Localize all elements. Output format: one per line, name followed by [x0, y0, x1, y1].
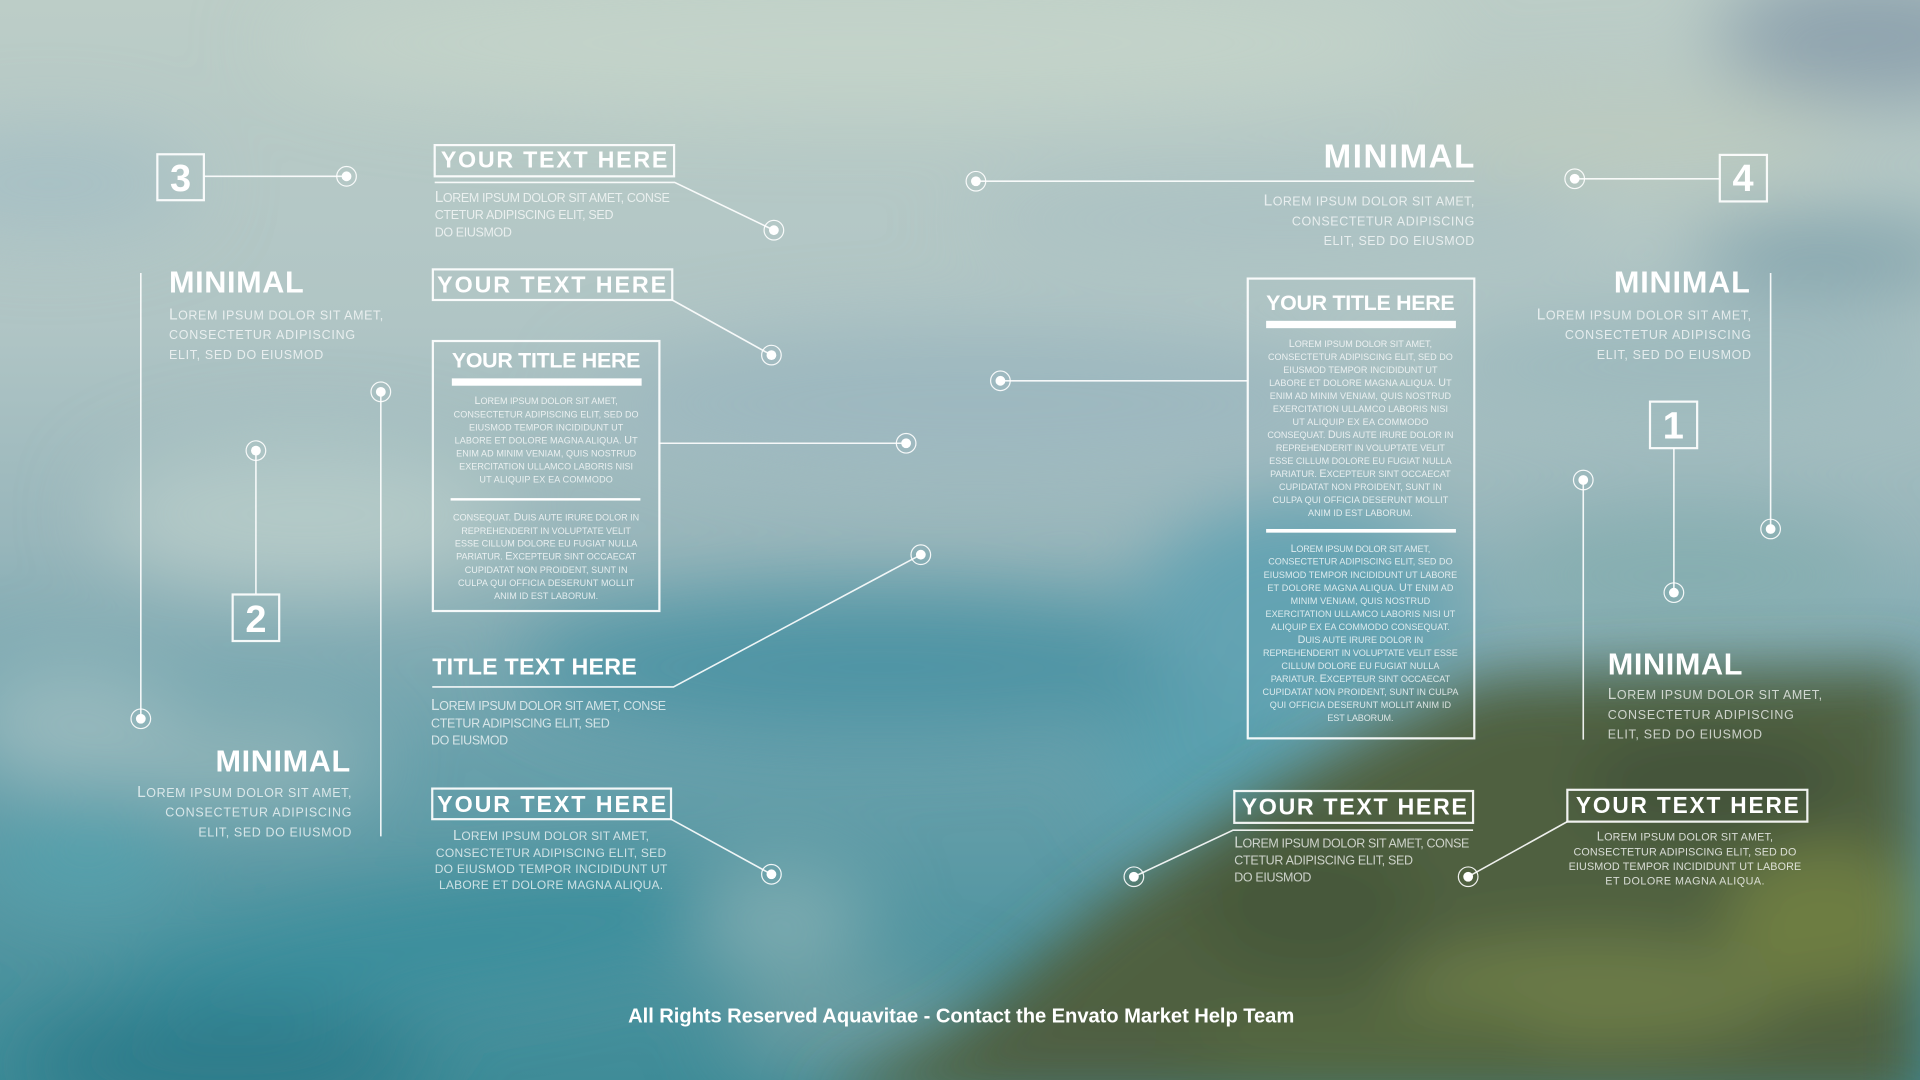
panel: right title box: ET DOLORE MAGNA ALIQUA. UT ENIM AD [1267, 582, 1454, 594]
panel: right title box: CULPA QUI OFFICIA DESERUNT MOLLIT [1273, 495, 1449, 505]
panel: left title box: ANIM ID EST LABORUM. [494, 591, 598, 601]
panel: right title box: QUI OFFICIA DESERUNT MOLLIT ANIM ID [1270, 700, 1451, 710]
panel: right title box: CONSECTETUR ADIPISCING ELIT, SED DO [1268, 557, 1453, 567]
block: minimal upper left: ELIT, SED DO EIUSMOD [169, 348, 323, 362]
callout: number 1 [1650, 402, 1697, 602]
callout: number 3: 3 [170, 158, 191, 200]
block: minimal upper left: MINIMAL [169, 266, 304, 300]
block: minimal lower right [1573, 470, 1822, 741]
panel: right title box: UT ALIQUIP EX EA COMMODO [1292, 417, 1428, 427]
callout: top left text box: YOUR TEXT HERE [441, 147, 667, 173]
callout: top left text box: DO EIUSMOD [435, 225, 512, 239]
callout: lower left text box: LOREM IPSUM DOLOR SIT AMET, [453, 828, 649, 844]
callout: bottom right text box [1458, 790, 1807, 888]
callout: top right minimal: MINIMAL [1324, 139, 1474, 176]
panel: right title box: EXERCITATION ULLAMCO LABORIS NISI [1273, 404, 1448, 414]
block: minimal upper right [1537, 266, 1780, 539]
callout: top right minimal [966, 139, 1474, 248]
panel: left title box: EXERCITATION ULLAMCO LABORIS NISI [459, 462, 633, 472]
callout: second text box [433, 269, 781, 365]
callout: top left text box: CTETUR ADIPISCING ELIT, SED [435, 208, 613, 222]
callout: number 4 [1565, 155, 1767, 201]
callout: top right minimal: ELIT, SED DO EIUSMOD [1324, 234, 1474, 248]
callout: title text here: TITLE TEXT HERE [432, 654, 637, 680]
block: minimal lower left: MINIMAL [216, 744, 350, 778]
panel: left title box: PARIATUR. EXCEPTEUR SINT OCCAECAT [456, 551, 637, 563]
callout: bottom centre-right text box: DO EIUSMOD [1234, 871, 1311, 885]
panel: left title box: EIUSMOD TEMPOR INCIDIDUNT UT [469, 422, 624, 432]
panel: right title box: PARIATUR. EXCEPTEUR SINT OCCAECAT [1270, 468, 1451, 480]
callout: bottom centre-right text box: LOREM IPSUM DOLOR SIT AMET, CONSE [1234, 834, 1469, 851]
panel: right title box: CUPIDATAT NON PROIDENT, SUNT IN CULPA [1262, 687, 1459, 697]
panel: right title box: PARIATUR. EXCEPTEUR SINT OCCAECAT [1271, 673, 1451, 685]
panel: left title box: CONSEQUAT. DUIS AUTE IRURE DOLOR IN [453, 511, 639, 523]
panel: right title box: EST LABORUM. [1327, 713, 1393, 723]
panel: right title box: MINIM VENIAM, QUIS NOSTRUD [1291, 596, 1431, 606]
callout: title text here: DO EIUSMOD [431, 733, 508, 747]
panel: right title box: REPREHENDERIT IN VOLUPTATE VELIT [1276, 443, 1445, 453]
panel: left title box: ESSE CILLUM DOLORE EU FUGIAT NULLA [455, 539, 638, 549]
callout: bottom right text box: CONSECTETUR ADIPISCING ELIT, SED DO [1573, 846, 1796, 858]
panel: right title box: ESSE CILLUM DOLORE EU FUGIAT NULLA [1269, 456, 1453, 466]
panel: right title box: EIUSMOD TEMPOR INCIDIDUNT UT LABORE [1264, 570, 1457, 580]
callout: bottom right text box: EIUSMOD TEMPOR INCIDIDUNT UT LABORE [1569, 861, 1801, 873]
callout: lower left text box: CONSECTETUR ADIPISCING ELIT, SED [436, 846, 666, 860]
panel: right title box [991, 279, 1474, 738]
panel: right title box: LOREM IPSUM DOLOR SIT AMET, [1289, 338, 1432, 350]
block: minimal upper right: CONSECTETUR ADIPISCING [1565, 328, 1751, 342]
panel: left title box: REPREHENDERIT IN VOLUPTATE VELIT [461, 526, 631, 536]
callout: top left text box [435, 145, 784, 240]
block: minimal lower left: ELIT, SED DO EIUSMOD [198, 825, 351, 839]
panel: right title box: REPREHENDERIT IN VOLUPTATE VELIT ESSE [1263, 648, 1458, 658]
callout: top right minimal: LOREM IPSUM DOLOR SIT AMET, [1264, 193, 1474, 210]
callout: lower left text box [432, 789, 781, 892]
callout: number 1: 1 [1663, 405, 1684, 447]
panel: right title box: CONSECTETUR ADIPISCING ELIT, SED DO [1268, 352, 1453, 362]
panel: right title box: LABORE ET DOLORE MAGNA ALIQUA. UT [1269, 377, 1452, 389]
block: minimal lower left: CONSECTETUR ADIPISCING [165, 806, 351, 820]
callout: number 3 [157, 154, 356, 200]
callout: top right minimal: CONSECTETUR ADIPISCING [1292, 214, 1474, 228]
panel: left title box [433, 341, 916, 611]
block: minimal lower right: CONSECTETUR ADIPISCING [1608, 708, 1794, 722]
callout: title text here: LOREM IPSUM DOLOR SIT AMET, CONSE [431, 697, 666, 714]
callout: number 4: 4 [1733, 158, 1754, 200]
panel: left title box: LOREM IPSUM DOLOR SIT AMET, [474, 395, 618, 407]
callout: number 2: 2 [245, 599, 266, 641]
callout: title text here [431, 545, 931, 747]
panel: right title box: CILLUM DOLORE EU FUGIAT NULLA [1281, 661, 1440, 671]
panel: left title box: ENIM AD MINIM VENIAM, QUIS NOSTRUD [456, 449, 637, 459]
panel: right title box: ENIM AD MINIM VENIAM, QUIS NOSTRUD [1270, 391, 1451, 401]
callout: top left text box: LOREM IPSUM DOLOR SIT AMET, CONSE [435, 189, 670, 206]
panel: right title box: YOUR TITLE HERE [1266, 291, 1455, 315]
callout: bottom right text box: ET DOLORE MAGNA ALIQUA. [1605, 876, 1764, 888]
panel: right title box: CONSEQUAT. DUIS AUTE IRURE DOLOR IN [1267, 429, 1453, 441]
panel: right title box: EIUSMOD TEMPOR INCIDIDUNT UT [1283, 365, 1438, 375]
callout: lower left text box: LABORE ET DOLORE MAGNA ALIQUA. [439, 878, 663, 892]
block: minimal lower left: LOREM IPSUM DOLOR SIT AMET, [137, 784, 351, 801]
panel: right title box: CUPIDATAT NON PROIDENT, SUNT IN [1279, 482, 1442, 492]
block: minimal lower right: ELIT, SED DO EIUSMOD [1608, 727, 1762, 741]
panel: left title box: CONSECTETUR ADIPISCING ELIT, SED DO [454, 410, 639, 420]
block: minimal upper left [131, 266, 383, 729]
callout: number 2 [233, 441, 279, 641]
block: minimal upper right: LOREM IPSUM DOLOR SIT AMET, [1537, 307, 1751, 324]
panel: right title box: EXERCITATION ULLAMCO LABORIS NISI UT [1266, 609, 1456, 619]
callout: bottom right text box: LOREM IPSUM DOLOR SIT AMET, [1597, 829, 1773, 844]
callout: bottom centre-right text box: CTETUR ADIPISCING ELIT, SED [1234, 853, 1413, 867]
panel: right title box: LOREM IPSUM DOLOR SIT AMET, [1291, 543, 1430, 555]
panel: left title box: YOUR TITLE HERE [452, 348, 640, 372]
block: minimal lower right: MINIMAL [1608, 648, 1742, 682]
callout: second text box: YOUR TEXT HERE [437, 272, 666, 298]
callout: lower left text box: DO EIUSMOD TEMPOR INCIDIDUNT UT [435, 862, 668, 876]
panel: right title box: ALIQUIP EX EA COMMODO CONSEQUAT. [1271, 622, 1450, 632]
block: minimal upper right: MINIMAL [1614, 266, 1750, 300]
block: minimal upper left: CONSECTETUR ADIPISCING [169, 328, 355, 342]
panel: left title box: UT ALIQUIP EX EA COMMODO [479, 474, 613, 484]
panel: right title box: ANIM ID EST LABORUM. [1308, 508, 1413, 518]
panel: right title box: DUIS AUTE IRURE DOLOR IN [1298, 634, 1423, 646]
block: minimal lower right: LOREM IPSUM DOLOR SIT AMET, [1608, 686, 1822, 703]
block: minimal upper right: ELIT, SED DO EIUSMOD [1597, 348, 1751, 362]
panel: left title box: CUPIDATAT NON PROIDENT, SUNT IN [465, 565, 628, 575]
callout: bottom centre-right text box: YOUR TEXT HERE [1242, 793, 1467, 819]
callout: bottom right text box: YOUR TEXT HERE [1576, 792, 1799, 818]
panel: left title box: LABORE ET DOLORE MAGNA ALIQUA. UT [455, 434, 638, 446]
footer credit: All Rights Reserved Aquavitae - Contact the Envato Market Help Team [628, 1005, 1294, 1027]
block: minimal upper left: LOREM IPSUM DOLOR SIT AMET, [169, 307, 383, 324]
panel: left title box: CULPA QUI OFFICIA DESERUNT MOLLIT [458, 578, 635, 588]
callout: bottom centre-right text box [1124, 791, 1473, 887]
callout: title text here: CTETUR ADIPISCING ELIT, SED [431, 716, 610, 730]
callout: lower left text box: YOUR TEXT HERE [437, 791, 666, 817]
block: minimal lower left [137, 382, 391, 839]
